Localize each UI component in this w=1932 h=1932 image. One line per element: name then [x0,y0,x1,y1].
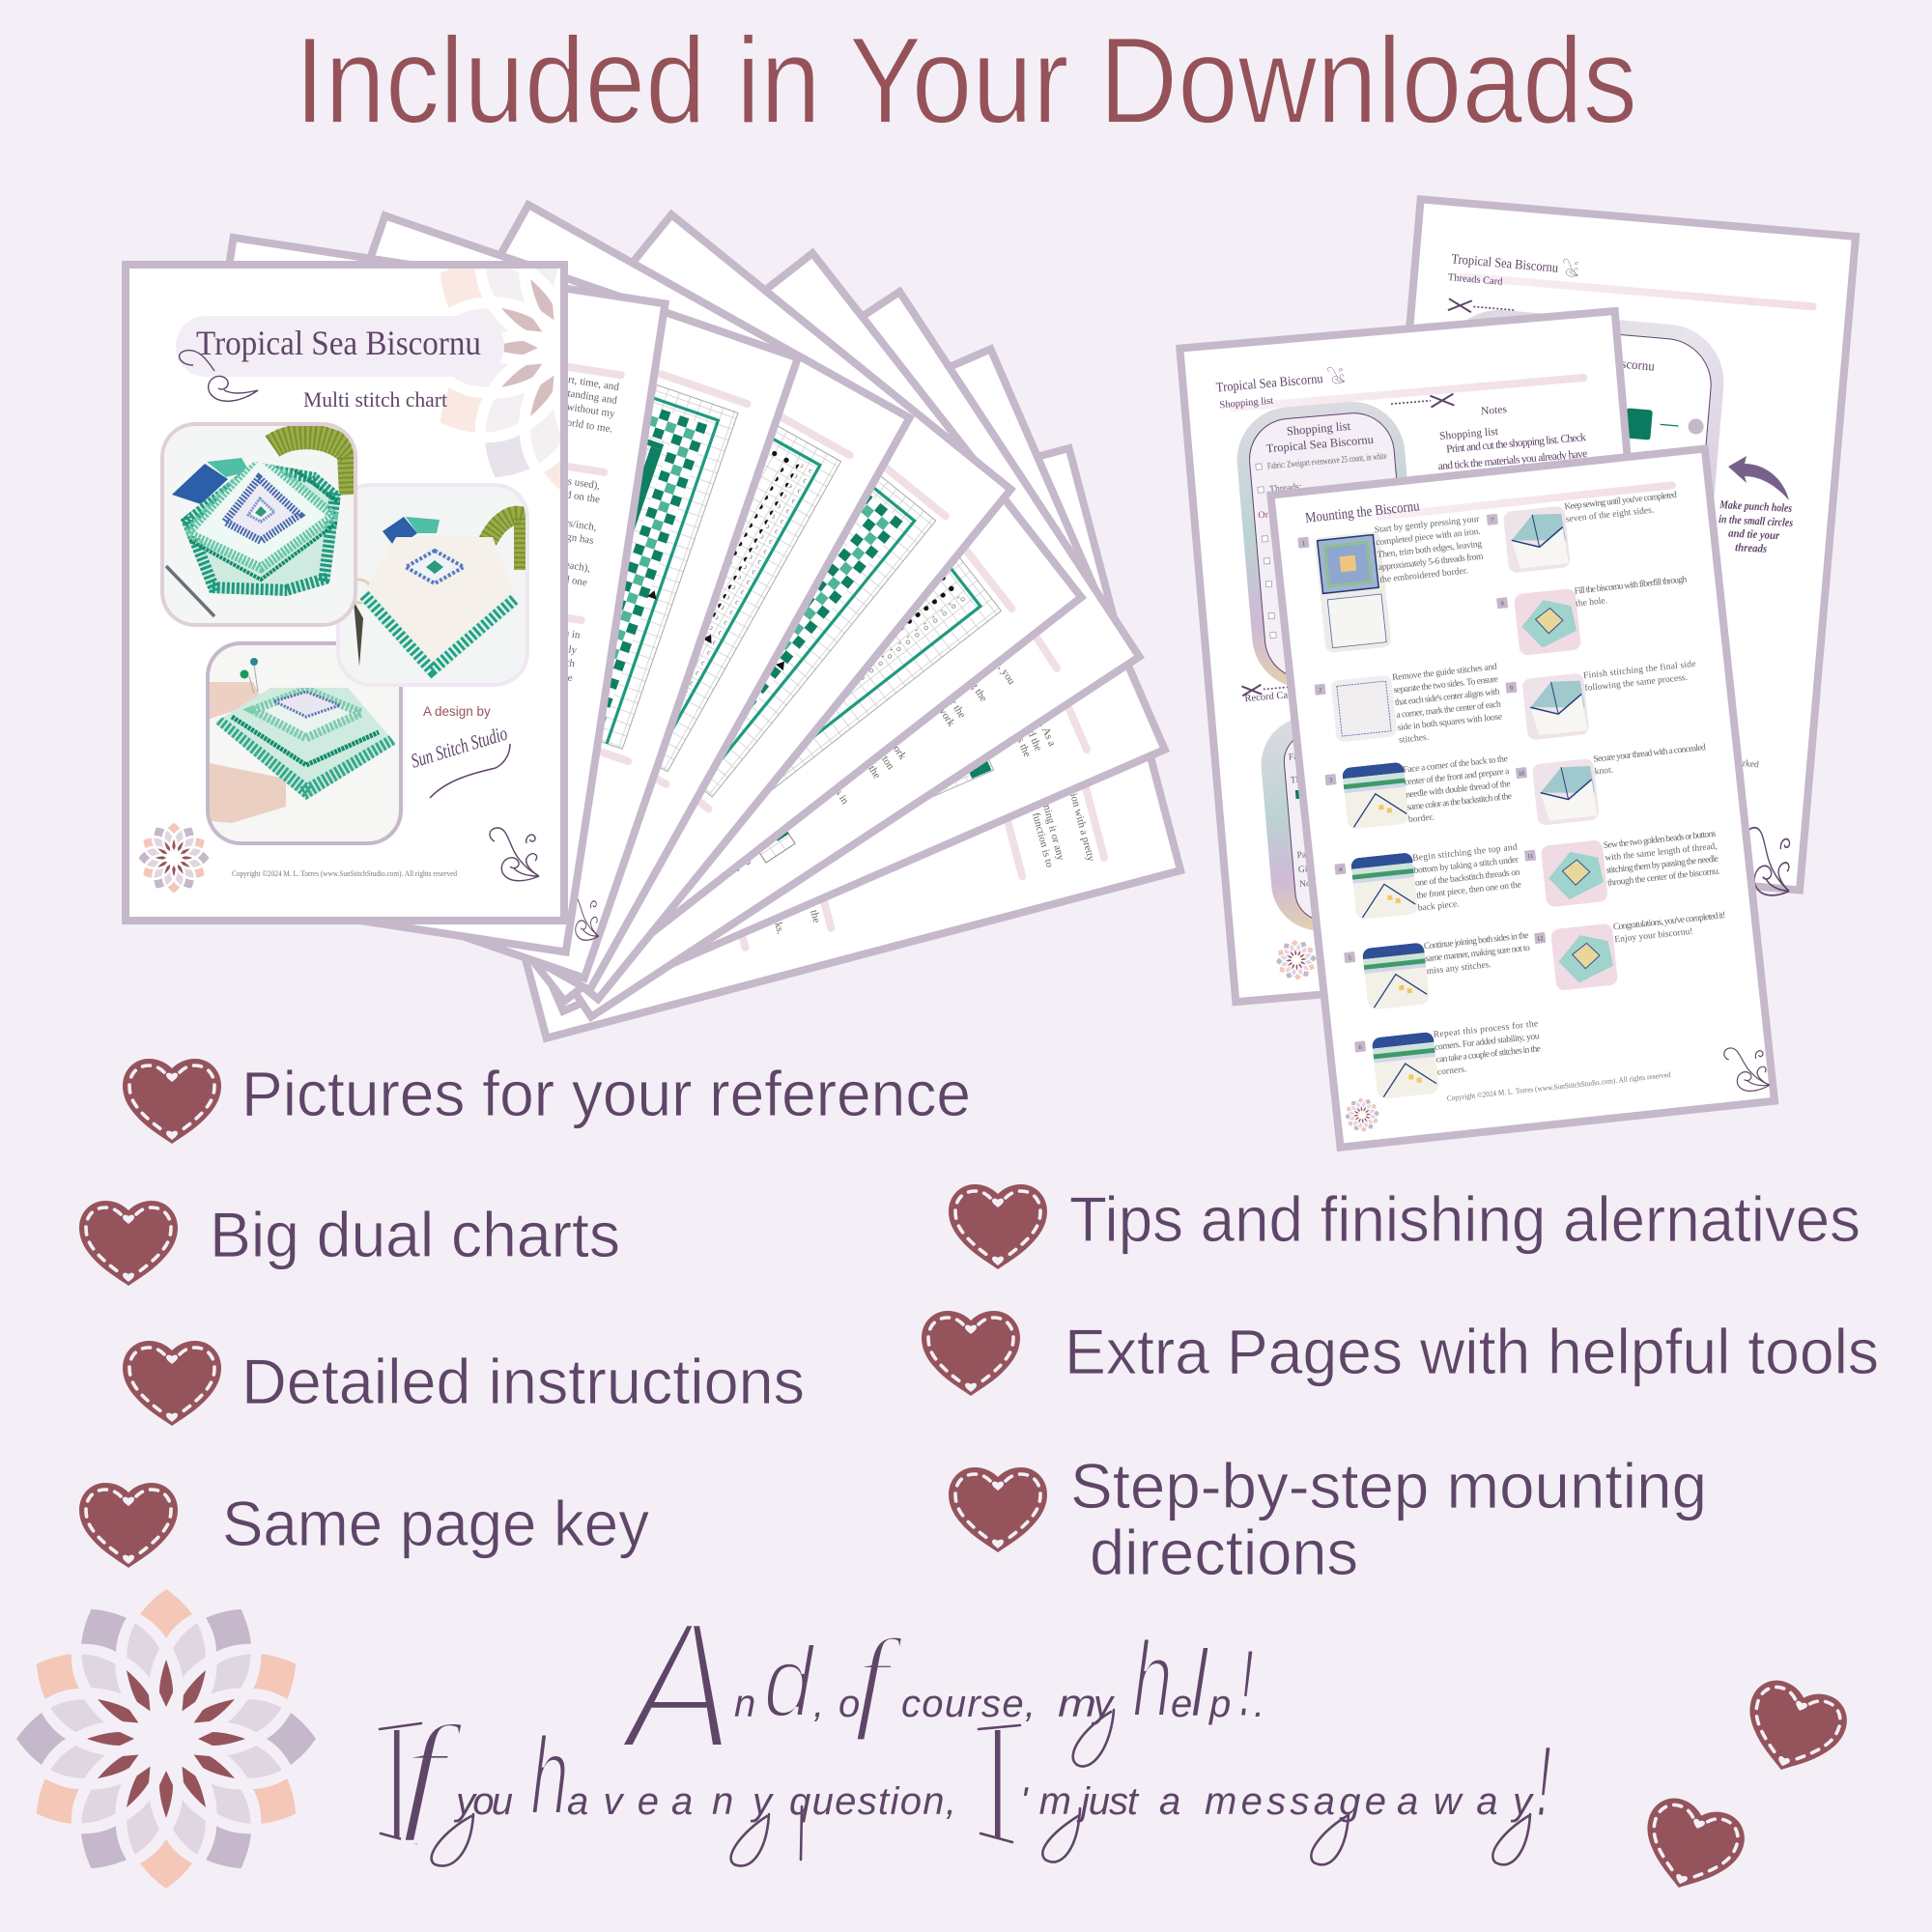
visible text fragments: rs/inch, [564,517,598,533]
step 6: 6 [1358,1044,1363,1051]
step 3 [1324,751,1515,834]
visible text fragments: ks. [772,921,786,936]
text: tips and finishing alternatives: Tips and finishing alernatives [1069,1183,1861,1255]
script line 2: a [1159,1780,1180,1823]
script line 2: I [974,1688,1021,1880]
step 3: needle with double thread of the [1406,779,1511,800]
page 2: checker chart with dark band [171,215,798,978]
visible text fragments: in the [805,898,822,924]
icon: large flower logo [16,1589,316,1889]
visible text fragments: to [740,854,754,867]
arrow: curved purple [1728,456,1789,500]
icon: heart bullet 3 [123,1341,221,1426]
step 3: center of the front and prepare a [1404,766,1510,787]
panel: shopping list page [1179,311,1671,1002]
script line 2: you [453,1780,513,1823]
icon: swirl on page 2 [568,895,599,940]
small flower logo [1274,938,1318,981]
visible text fragments: d the [862,757,883,781]
photo 2: biscornu back [336,483,529,687]
visible text fragments [706,644,1022,877]
step 12: 12 [1537,935,1544,943]
step 4: bottom by taking a stitch under [1413,854,1520,876]
visible text fragments: ign has [562,530,594,547]
page heading: Threads Card [1447,272,1504,288]
script line 2: f [401,1699,465,1843]
notes column: Notes [1481,404,1508,417]
panel: threads card page [1364,199,1856,897]
step 10: 10 [1518,770,1525,778]
visible text fragments [1005,702,1058,759]
record card: Fabric [1288,751,1313,763]
visible text fragments: rstanding and [559,386,618,407]
step 12: Congratulations, you've completed it! [1612,910,1726,932]
cover title pill [176,316,504,377]
visible text fragments: n in [563,628,582,641]
step 2: Remove the guide stitches and [1392,662,1497,683]
faded flower watermark [440,269,560,490]
step 2: stitches. [1399,732,1430,746]
shopping list card: Tropical Sea Biscornu [1265,433,1375,455]
visible text fragments: d, work [929,696,957,729]
icon: tilted heart lower [1632,1792,1751,1902]
step 5: Continue joining both sides in the [1423,930,1529,952]
step 7: 7 [1491,517,1495,524]
step 11: with the same length of thread, [1605,841,1718,864]
scissors cut line [1391,394,1454,411]
step 1: completed piece with an iron. [1376,526,1481,548]
photo 1: biscornu front [160,422,357,627]
small flower logo [1343,1096,1381,1134]
script line 1: p [1208,1683,1231,1725]
page heading [1447,249,1819,315]
step 11 [1524,828,1722,909]
notes column [1434,397,1588,472]
step 6: corners. For added stability, you [1435,1031,1540,1053]
step 11: Sew the two golden beads or buttons [1603,829,1717,851]
visible text fragments: world to me. [558,415,613,436]
step 1: approximately 5-6 threads from [1378,552,1485,573]
step 9: following the same process. [1584,672,1689,694]
script line 2 [373,1688,1551,1880]
step 5: 5 [1348,954,1351,962]
script line 2: message [1205,1780,1386,1823]
icon: heart bullet 4 [79,1483,178,1568]
threads card: Tropical Sea Biscornu [1544,350,1656,374]
text: same page key: Same page key [222,1488,649,1559]
note: punch holes [1719,497,1794,555]
script line 1: A [617,1583,734,1788]
script line 1: e [1171,1683,1192,1725]
step 7: Keep sewing until you've completed [1564,490,1678,512]
step 10 [1515,742,1713,828]
script line 1: f [854,1615,904,1742]
step 2: side in both squares with loose [1397,711,1503,733]
step 5 [1344,930,1535,1012]
visible text fragments: framing it or any [1037,789,1066,862]
visible text fragments: r work [883,732,909,762]
step 12 [1534,910,1732,993]
note: punch holes: in the small circles [1719,512,1794,529]
step 2: a corner, mark the center of each [1396,698,1502,721]
visible text fragments: ed on the [560,488,601,505]
icon: feather swirl [180,351,258,401]
page heading: Mounting the Biscornu [1304,498,1421,526]
chart fragment [879,704,994,808]
visible text fragments: without my [566,401,616,420]
page 7: text page with small chart [389,349,1165,1011]
mini chart [753,824,795,863]
record card: Pattern [1296,848,1323,861]
icon: heart bullet 1 [123,1059,221,1144]
step 4: Begin stitching the top and [1412,842,1518,864]
panel: cover page [122,261,568,924]
visible text fragments [517,373,620,685]
page 5: dotted chart [296,253,1081,1001]
stitch dots [598,440,812,756]
step 3: 3 [1329,777,1333,784]
title: Included in Your Downloads [295,12,1637,149]
step 2: 2 [1319,687,1322,694]
script line 2: away [1397,1780,1535,1823]
visible text fragments: ch [564,657,576,670]
notes column: Print and cut the shopping list. Check [1446,432,1587,455]
step 1 [1297,514,1492,655]
page heading [1215,345,1588,412]
checker band [489,387,716,744]
step 3: same color as the backstitch of the [1406,791,1513,812]
script line 2: h [530,1715,569,1838]
stitch dots [743,558,970,754]
step 10: knot. [1594,765,1614,778]
visible text fragments: ming the [959,667,989,704]
script line 1: m [1058,1683,1096,1725]
small flower logo [139,823,209,893]
signature: Sun Stitch Studio [408,722,510,798]
text: big dual charts: Big dual charts [210,1199,620,1270]
visible text fragments: wards the [1006,717,1033,759]
A design by label: A design by [423,704,491,719]
visible text fragments: te [564,671,574,684]
icon: heart bullet 6 [922,1311,1020,1396]
step 2: separate the two sides. To ensure [1393,674,1499,696]
step 6: Repeat this process for the [1433,1018,1539,1040]
page 8: text page [435,448,1180,1038]
step 7: seven of the eight sides. [1565,505,1655,525]
step 6: corners. [1436,1064,1467,1078]
icon: heart bullet 7 [949,1467,1047,1552]
step 9: Finish stitching the final side [1583,659,1696,681]
page heading: Shopping list [1219,396,1274,411]
script line 2: I [373,1688,420,1880]
record card [1258,705,1459,934]
step 7 [1486,490,1684,576]
icon: corner swirl [490,828,539,881]
step 6: can take a couple of stitches in the [1435,1043,1541,1065]
icon: heart bullet 2 [79,1201,178,1286]
step 4: one of the backstitch threads on [1414,867,1520,889]
step 11: through the center of the biscornu. [1606,866,1720,889]
visible text fragments [756,781,1096,945]
threads card [1411,305,1728,734]
step 6 [1354,1018,1545,1101]
visible text fragments: each), [564,559,591,575]
icon: tilted heart upper [1734,1674,1854,1784]
step 4: back piece. [1417,898,1460,914]
visible text fragments: art, time, and [562,373,620,393]
page 3: dotted chart [209,205,910,990]
visible text fragments: cotton [872,743,896,772]
panel: fanned instruction and chart pages [134,205,1180,1038]
page heading: Tropical Sea Biscornu [1215,372,1323,396]
shopping list card: Or [1258,509,1269,521]
visible text fragments: ly function is to [1027,801,1056,869]
text: step-by-step mounting directions [1070,1450,1707,1588]
script line 2: any [671,1780,775,1823]
page copyright: Copyright ©2024 M. L. Torres (www.SunStitchStudio.com). All rights reserved [1446,1070,1671,1103]
record card: Notes [1299,877,1321,890]
step 12: Enjoy your biscornu! [1614,926,1693,945]
step 9: 9 [1510,685,1514,692]
visible text fragments: ely [563,643,578,657]
step 2: that each side's center aligns with [1394,687,1500,708]
visible text fragments: ntion with a pretty [1065,784,1096,863]
step 5: miss any stitches. [1426,959,1492,977]
page 1: introduction text [134,238,665,952]
text: step-by-step mounting directions: Step-by-step mounting [1070,1450,1707,1521]
step 4: the front piece, then one on the [1416,879,1521,901]
step 11: stitching them by passing the needle [1605,853,1719,876]
icon: heart bullet 5 [949,1184,1047,1269]
panel: mounting the biscornu page [1270,449,1775,1148]
shopping list card: Fabric: Zweigart evenweave 25 count, in white [1267,451,1387,471]
record card: Threads [1290,773,1321,785]
script line 2: 'm [1020,1780,1071,1823]
text: pictures for your reference: Pictures for your reference [242,1058,971,1129]
pink section bars [706,705,1104,952]
script line 1: d [763,1626,816,1739]
script line 1: h [1132,1619,1173,1740]
step 1: Then, trim both edges, leaving [1377,539,1483,560]
step 4 [1334,840,1523,922]
step 11: 11 [1527,853,1534,860]
script line 2: ave [567,1780,659,1823]
text: extra pages: Extra Pages with helpful tools [1065,1316,1879,1387]
step 1: Start by gently pressing your [1374,514,1481,535]
record card label: Record Card [1244,690,1297,704]
script line 1: o [838,1683,860,1725]
icon: corner swirl [1723,1044,1770,1094]
script line 1: course, [901,1683,1036,1725]
page heading: Tropical Sea Biscornu [1451,252,1559,276]
cover title pill: Tropical Sea Biscornu [196,324,481,362]
step 3: Face a corner of the back to the [1403,753,1508,776]
script line 1 [617,1583,1264,1788]
notes column: and tick the materials you already have [1437,448,1588,472]
signature: Sun Stitch Studio: Sun Stitch Studio [408,722,510,773]
shopping list card [1233,397,1424,693]
photo 3: biscornu held in hand [206,641,403,845]
note: punch holes: and tie your [1728,526,1780,542]
step 10: Secure your thread with a concealed [1593,742,1706,765]
icon: corner swirl [1742,827,1794,896]
note: punch holes: threads [1735,540,1768,555]
visible text fragments: efore, you [984,644,1017,687]
script line 2: ! [1536,1725,1551,1838]
step 3: border. [1407,811,1435,825]
script line 1: . [1254,1683,1264,1725]
shopping list card: Threads: [1269,481,1302,495]
script line 1: ! [1238,1630,1254,1738]
record card label [1241,682,1297,704]
text: detailed instructions: Detailed instructions [242,1346,805,1417]
step 8 [1496,574,1693,658]
step 8: 8 [1500,601,1504,608]
visible text fragments: c is used), [556,474,601,492]
scissors cut line [1448,298,1517,316]
step 5: same manner, making sure not to [1425,943,1531,964]
script line 1: l [1190,1630,1209,1738]
note: punch holes: Make punch holes [1719,497,1793,515]
shopping list card: Shopping list [1286,419,1351,438]
cover copyright: Copyright ©2024 M. L. Torres (www.SunStitchStudio.com). All rights reserved [232,869,457,878]
script line 1: , [813,1683,824,1725]
page 6: text page [352,292,1139,1017]
text: step-by-step mounting directions: directions [1090,1517,1358,1588]
script line 1: n [734,1683,755,1725]
visible text fragments: ers in [829,781,851,807]
step 8: the hole. [1576,595,1608,610]
page heading [1304,471,1676,528]
step 1: the embroidered border. [1379,565,1468,585]
visible text fragments: pleted the [1017,710,1044,753]
note fragment: the marked [1718,756,1759,770]
record card: Gifted [1297,863,1322,875]
script line 2: just [1076,1780,1140,1823]
page 4: checker chart [259,214,1010,999]
visible text fragments: itself. As a [1029,702,1058,748]
visible text fragments: nder the [939,685,968,721]
script line 1: y [1091,1683,1116,1725]
visible text fragments: be [728,860,743,875]
step 1: 1 [1301,540,1305,547]
step 4: 4 [1339,867,1343,873]
checker band [617,461,903,781]
step 2 [1314,662,1504,753]
notes column: Shopping list [1439,426,1499,442]
script line 2: question, [789,1780,956,1823]
step 9 [1505,659,1702,742]
visible text fragments: d one [563,574,588,588]
step 8: Fill the biscornu with fiberfill through [1574,574,1688,597]
cover subtitle: Multi stitch chart [303,387,447,412]
